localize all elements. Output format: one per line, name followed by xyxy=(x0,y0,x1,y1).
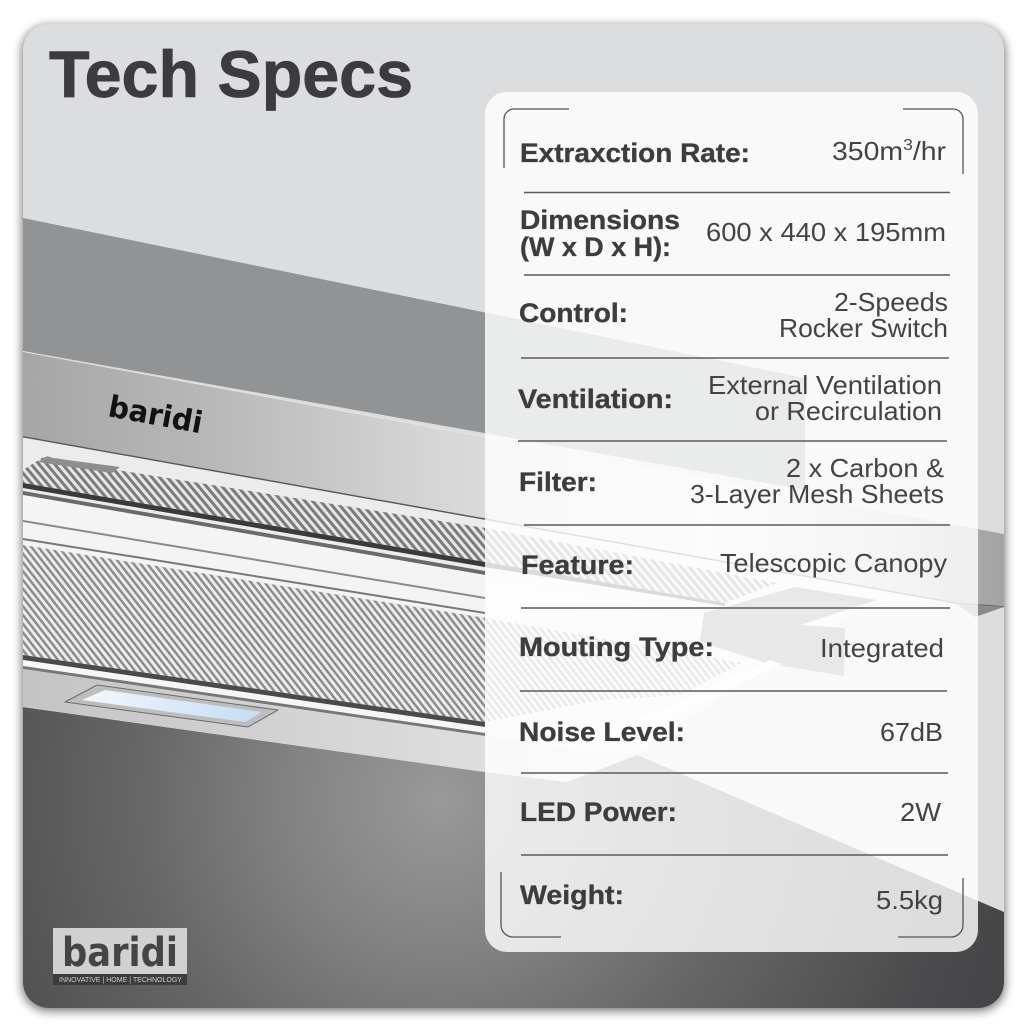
row: ventilation: External Ventilation xyxy=(708,370,942,400)
row dividers xyxy=(518,192,950,855)
row: extraction rate: /hr xyxy=(913,136,946,166)
row: LED power xyxy=(520,797,941,827)
row: dimensions: Dimensions xyxy=(520,205,680,235)
corner brackets xyxy=(501,109,963,937)
row: control xyxy=(519,287,948,343)
title: Tech Specs xyxy=(49,37,413,111)
row: extraction rate xyxy=(520,136,946,168)
row: filter xyxy=(519,453,944,509)
row: control: 2-Speeds xyxy=(834,287,948,317)
row: noise level: Noise Level: xyxy=(519,717,685,747)
bottom brand logo xyxy=(53,928,187,985)
row: mounting type: Integrated xyxy=(820,633,944,663)
hood front strip xyxy=(23,351,1004,606)
logo tagline strip xyxy=(53,974,187,985)
row: feature: Feature: xyxy=(521,550,634,580)
logo tagline: INNOVATIVE | HOME | TECHNOLOGY xyxy=(59,975,182,984)
lower silver strip xyxy=(23,669,485,772)
row: weight xyxy=(520,880,943,915)
diagonal canopy rail xyxy=(765,660,782,666)
row: dimensions xyxy=(520,205,946,262)
row: noise level xyxy=(519,717,943,747)
logo plate xyxy=(53,928,187,974)
canopy base xyxy=(23,438,485,772)
panel background xyxy=(485,92,978,952)
row: feature: Telescopic Canopy xyxy=(720,548,947,578)
strip underside xyxy=(958,605,1004,617)
row: mounting type: Mouting Type: xyxy=(519,632,714,662)
panel: specifications xyxy=(485,92,978,952)
brand mark on hood: baridi xyxy=(106,389,205,441)
row: dimensions: 600 x 440 x 195mm xyxy=(706,217,946,247)
white canopy band xyxy=(23,495,485,575)
upper rail xyxy=(23,483,725,606)
row: LED power: 2W xyxy=(900,797,941,827)
row: ventilation: or Recirculation xyxy=(755,396,942,426)
row: dimensions: (W x D x H): xyxy=(520,232,671,262)
chimney wall band xyxy=(23,218,805,490)
row: feature xyxy=(521,548,947,580)
row: ventilation xyxy=(518,370,942,426)
canopy band lines xyxy=(23,520,485,614)
strip edge lines xyxy=(23,351,1004,607)
dark gradient floor xyxy=(23,707,1004,1008)
lower hatched filter xyxy=(23,545,742,722)
row: weight: 5.5kg xyxy=(876,885,943,915)
row: weight: Weight: xyxy=(520,880,624,910)
row: noise level: 67dB xyxy=(880,717,943,747)
row: LED power: LED Power: xyxy=(520,797,677,827)
row: filter: Filter: xyxy=(519,467,597,497)
row: filter: 2 x Carbon & xyxy=(786,453,944,483)
canopy end bracket xyxy=(700,587,877,676)
upper hatched filter xyxy=(23,456,777,603)
row: extraction rate: Extraxction Rate: xyxy=(520,138,750,168)
logo wordmark: baridi xyxy=(62,930,178,976)
filter shaded lip xyxy=(38,457,120,473)
row: mounting type xyxy=(519,632,944,663)
row: extraction rate: 3 xyxy=(903,137,913,154)
LED light housing xyxy=(65,685,278,727)
row: control: Control: xyxy=(519,298,628,328)
row: control: Rocker Switch xyxy=(779,313,948,343)
row: filter: 3-Layer Mesh Sheets xyxy=(690,479,944,509)
row: ventilation: Ventilation: xyxy=(518,384,673,414)
row: extraction rate: 350m xyxy=(832,136,897,166)
lower filter rail xyxy=(23,655,485,736)
